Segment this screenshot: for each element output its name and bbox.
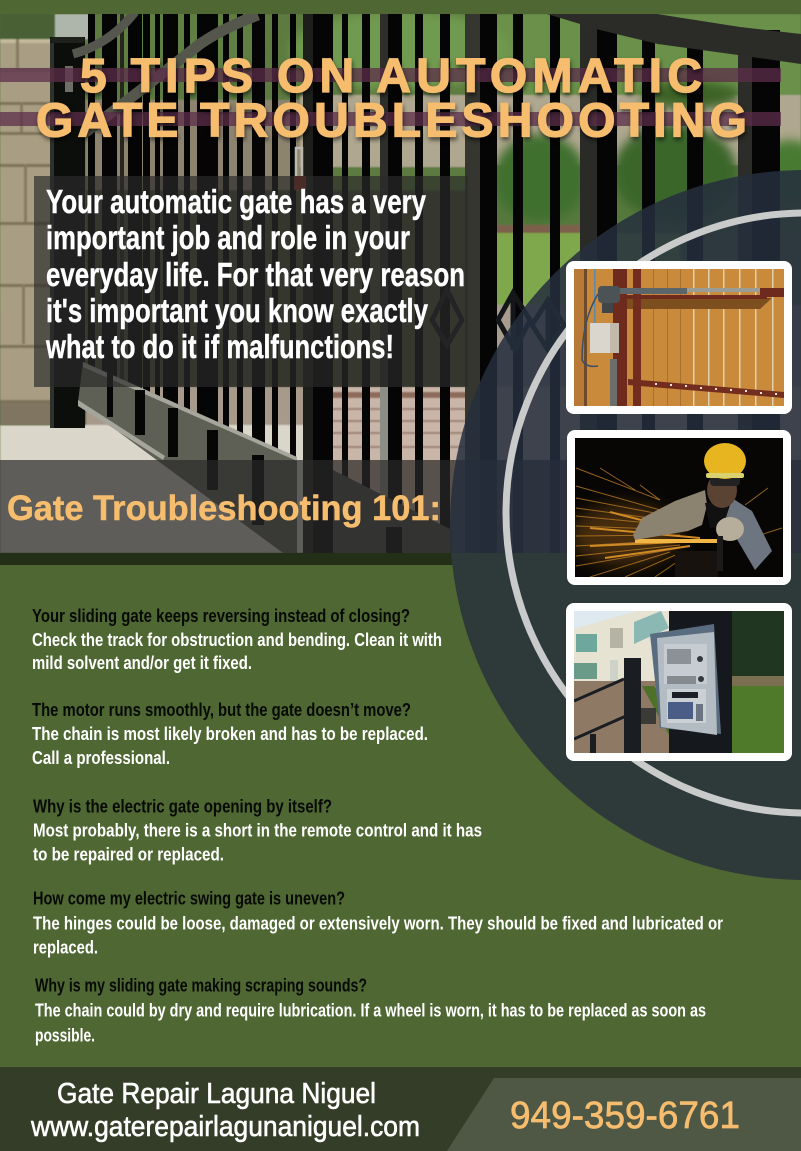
tip 5: Why is my sliding gate making scraping sounds?	[35, 974, 367, 996]
large dark circle	[450, 170, 801, 880]
intro text: everyday life. For that very reason	[46, 256, 465, 293]
tip 4	[33, 888, 723, 958]
tip 1: Check the track for obstruction and bending. Clean it with	[32, 629, 442, 650]
intro text: what to do it if malfunctions!	[45, 328, 394, 365]
bottom rail panel of gate	[78, 362, 297, 553]
gate post	[50, 37, 85, 428]
tip 5	[35, 974, 706, 1046]
tip 4: replaced.	[33, 936, 98, 958]
photo 3: gate intercom keypad	[566, 603, 792, 761]
phone number: 949-359-6761	[510, 1095, 740, 1137]
tip 3: to be repaired or replaced.	[33, 844, 224, 864]
tip 3: Most probably, there is a short in the remote control and it has	[33, 820, 482, 840]
translucent band behind subheading	[0, 460, 801, 553]
tip 5: possible.	[35, 1024, 95, 1046]
top rails of gate	[73, 12, 258, 134]
tip 3	[33, 796, 482, 864]
white ring	[506, 213, 801, 813]
tip 2: The chain is most likely broken and has to be replaced.	[32, 723, 428, 744]
wrought iron baskets	[432, 290, 564, 350]
tip 4: How come my electric swing gate is uneven?	[33, 888, 345, 908]
footer bar	[0, 1067, 801, 1151]
intro text: important job and role in your	[46, 219, 410, 256]
lit sides of bars	[303, 14, 752, 498]
tip 1: mild solvent and/or get it fixed.	[32, 652, 252, 673]
tip 2	[32, 699, 428, 768]
intro text	[45, 183, 465, 365]
panel: intro text box	[34, 176, 468, 387]
photo: iron gate background	[0, 10, 801, 553]
phone panel	[447, 1078, 801, 1151]
website: www.gaterepairlagunaniguel.com	[30, 1111, 420, 1143]
tip 2: The motor runs smoothly, but the gate doesn’t move?	[32, 699, 411, 720]
gate bars	[88, 14, 780, 553]
tips text	[32, 605, 723, 1046]
title: 5 TIPS ON AUTOMATIC	[80, 50, 702, 103]
company name: Gate Repair Laguna Niguel	[57, 1078, 376, 1110]
photo 1: gate opener arm	[566, 261, 792, 414]
tip 1	[32, 605, 442, 673]
intro text: it's important you know exactly	[46, 292, 428, 329]
title bands	[0, 68, 781, 126]
dark green strip	[0, 553, 801, 565]
subheading: Gate Troubleshooting 101:	[7, 489, 441, 528]
photo 2: worker grinding with sparks	[567, 430, 791, 585]
title	[36, 50, 747, 148]
tip 1: Your sliding gate keeps reversing instead of closing?	[32, 605, 410, 626]
title: GATE TROUBLESHOOTING	[36, 94, 747, 148]
intro text: Your automatic gate has a very	[46, 183, 426, 220]
second bottom rail	[333, 470, 452, 553]
tip 3: Why is the electric gate opening by itself?	[33, 796, 332, 816]
brick wall at left	[0, 39, 52, 425]
tip 2: Call a professional.	[32, 747, 170, 768]
lock on gate	[294, 148, 306, 190]
